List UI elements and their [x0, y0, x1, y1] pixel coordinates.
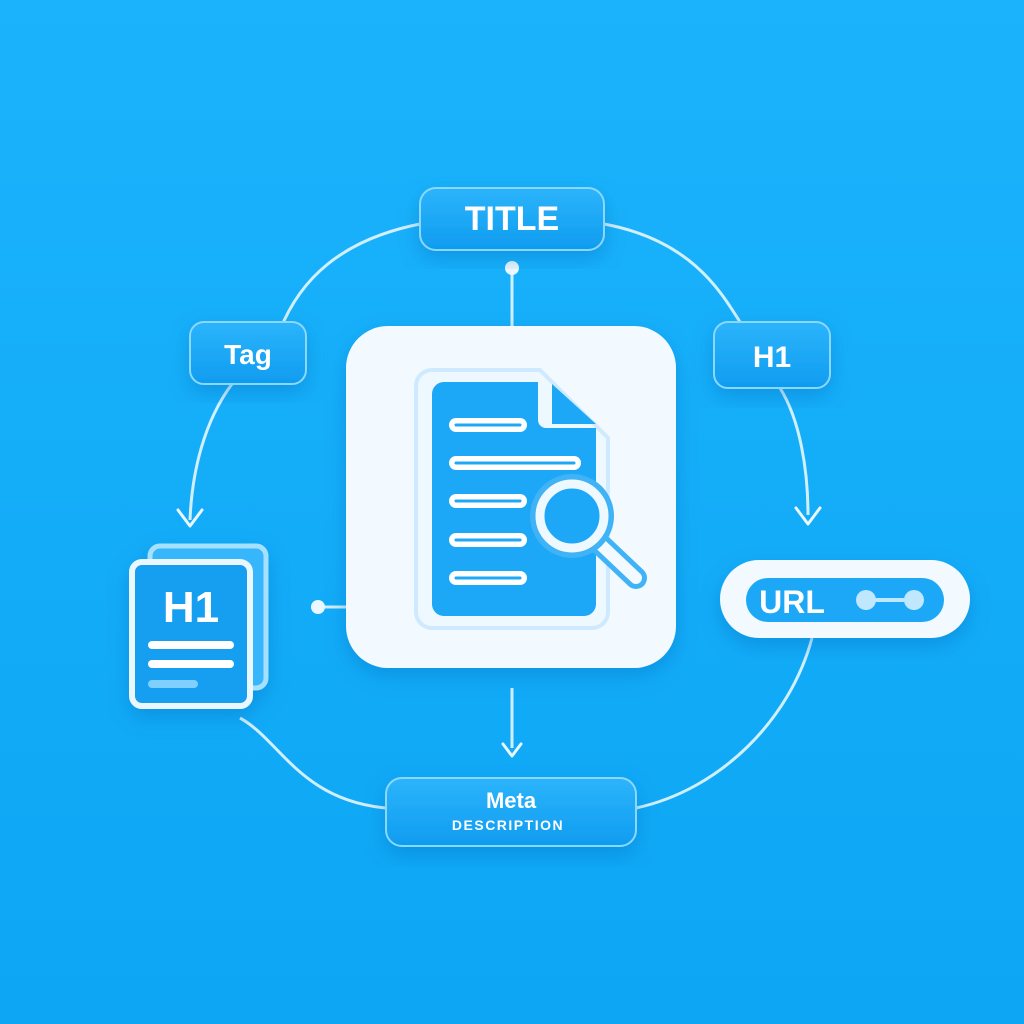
pill: H1: H1: [753, 341, 791, 374]
pill: URL: URL: [759, 584, 825, 620]
pill: URL: [720, 560, 970, 638]
arrows: [178, 508, 820, 756]
center panel with document icon: [346, 326, 676, 668]
pill: Tag: Tag: [224, 339, 272, 370]
pill: Meta description: DESCRIPTION: [452, 817, 564, 833]
pill: TITLE: TITLE: [465, 200, 559, 238]
icon: H1 document: [132, 546, 266, 706]
icon: document: [416, 370, 636, 628]
icon: H1 document: H1: [163, 583, 219, 632]
pill: Meta description: Meta: [486, 788, 537, 813]
pill: Meta description: [386, 778, 636, 846]
pill: Tag: [190, 322, 306, 384]
pill: H1: [714, 322, 830, 388]
pill: TITLE: [420, 188, 604, 250]
icon: magnifier: [538, 482, 636, 578]
connector ring: [190, 224, 812, 808]
